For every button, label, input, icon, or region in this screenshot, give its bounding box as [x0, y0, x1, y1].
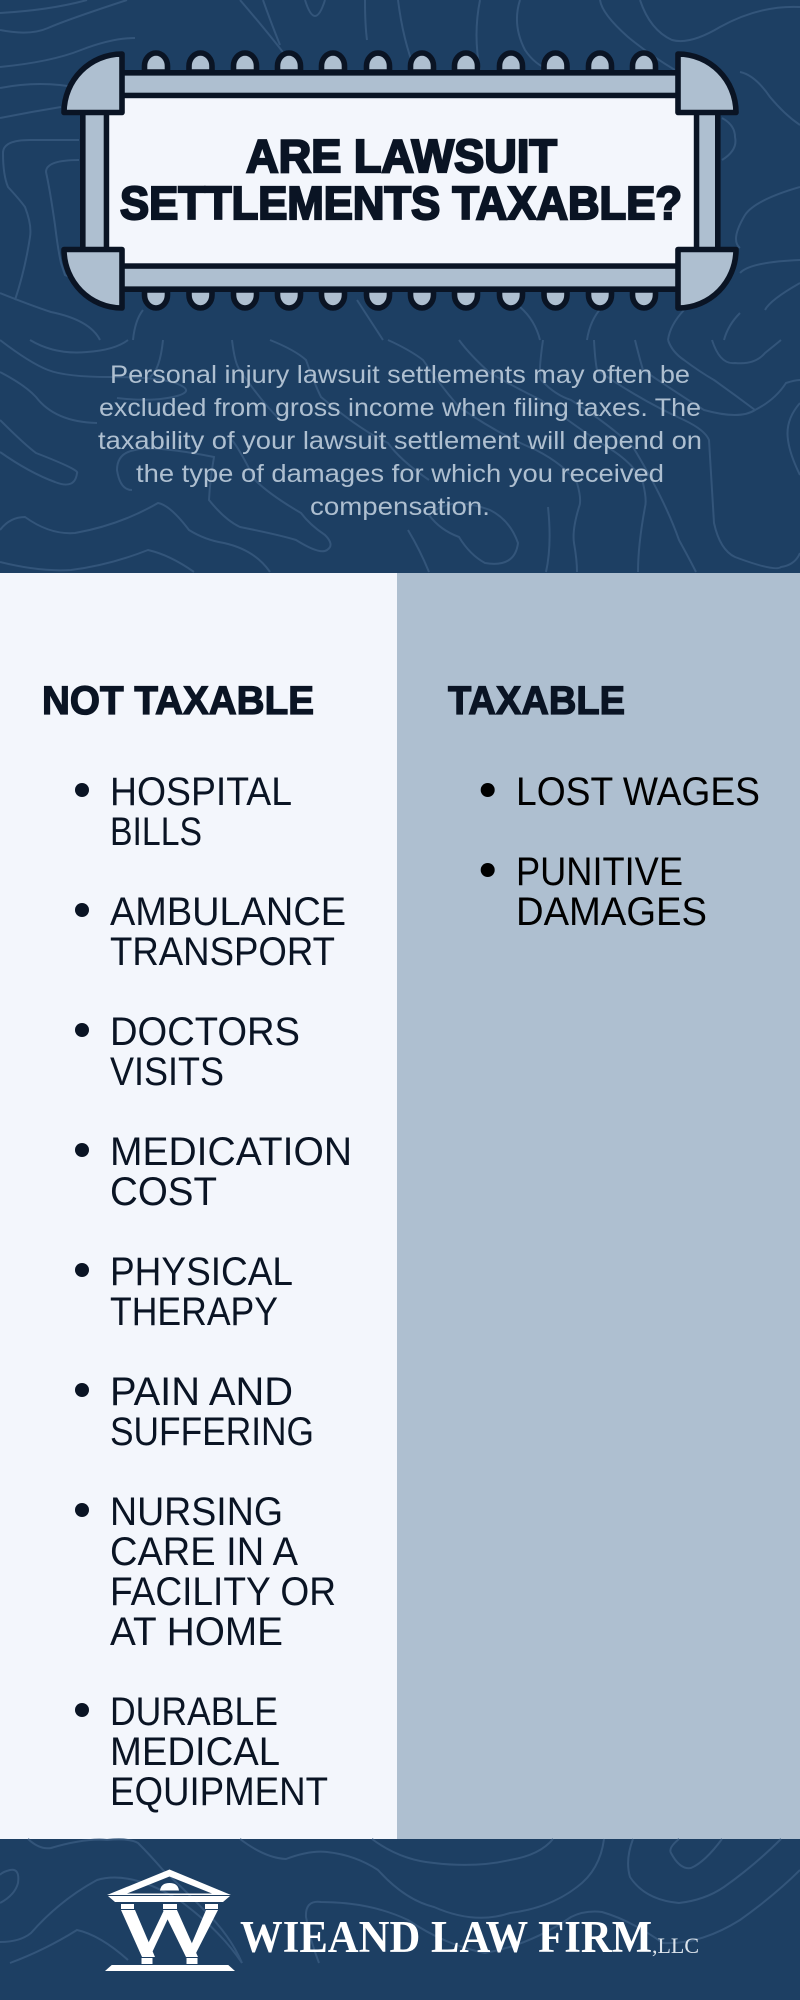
title text: SETTLEMENTS TAXABLE?	[120, 177, 682, 229]
logo: courthouse W mark	[105, 1870, 235, 1971]
intro paragraph	[98, 361, 702, 521]
intro paragraph: the type of damages for which you received	[136, 460, 664, 488]
list: not taxable items: NURSING	[110, 1490, 283, 1534]
intro paragraph: compensation.	[310, 493, 490, 521]
list: not taxable items: COST	[110, 1170, 217, 1214]
list: not taxable items: EQUIPMENT	[110, 1770, 328, 1814]
frame corner caps	[64, 54, 736, 308]
list: taxable items: PUNITIVE	[516, 850, 683, 894]
title text	[120, 130, 682, 229]
intro paragraph: taxability of your lawsuit settlement will depend on	[98, 427, 702, 455]
header background panel	[0, 0, 800, 573]
list: not taxable items: THERAPY	[110, 1290, 278, 1334]
panel: taxable	[397, 573, 800, 1839]
title frame	[64, 53, 736, 308]
list: taxable items: LOST WAGES	[516, 770, 760, 814]
list: not taxable items: BILLS	[110, 810, 202, 854]
panel: not taxable	[0, 573, 397, 1839]
list: not taxable items: DOCTORS	[110, 1010, 300, 1054]
list: taxable items	[481, 770, 760, 934]
footer panel	[0, 1839, 800, 2000]
intro paragraph: Personal injury lawsuit settlements may often be	[110, 361, 690, 389]
list: not taxable items: MEDICAL	[110, 1730, 280, 1774]
list: not taxable items: AMBULANCE	[110, 890, 346, 934]
list: not taxable items: MEDICATION	[110, 1130, 352, 1174]
frame bars and white title plate	[83, 73, 718, 289]
frame knobs: top and bottom rows	[144, 53, 656, 308]
heading: not taxable: NOT TAXABLE	[42, 679, 314, 723]
list: not taxable items: AT HOME	[110, 1610, 283, 1654]
list: not taxable items: PAIN AND	[110, 1370, 293, 1414]
list: taxable items: DAMAGES	[516, 890, 707, 934]
logo: firm name: ,LLC	[652, 1933, 699, 1958]
list: not taxable items: PHYSICAL	[110, 1250, 293, 1294]
intro paragraph: excluded from gross income when filing taxes. The	[99, 394, 701, 422]
logo: firm name: WIEAND LAW FIRM	[240, 1912, 652, 1962]
list: not taxable items: SUFFERING	[110, 1410, 314, 1454]
heading: taxable: TAXABLE	[448, 679, 625, 723]
list: not taxable items: DURABLE	[110, 1690, 278, 1734]
list: not taxable items: FACILITY OR	[110, 1570, 336, 1614]
title text: ARE LAWSUIT	[246, 130, 557, 182]
list: not taxable items: TRANSPORT	[110, 930, 335, 974]
list: not taxable items: CARE IN A	[110, 1530, 298, 1574]
list: not taxable items: VISITS	[110, 1050, 224, 1094]
list: not taxable items: HOSPITAL	[110, 770, 292, 814]
list: not taxable items	[75, 770, 352, 1814]
